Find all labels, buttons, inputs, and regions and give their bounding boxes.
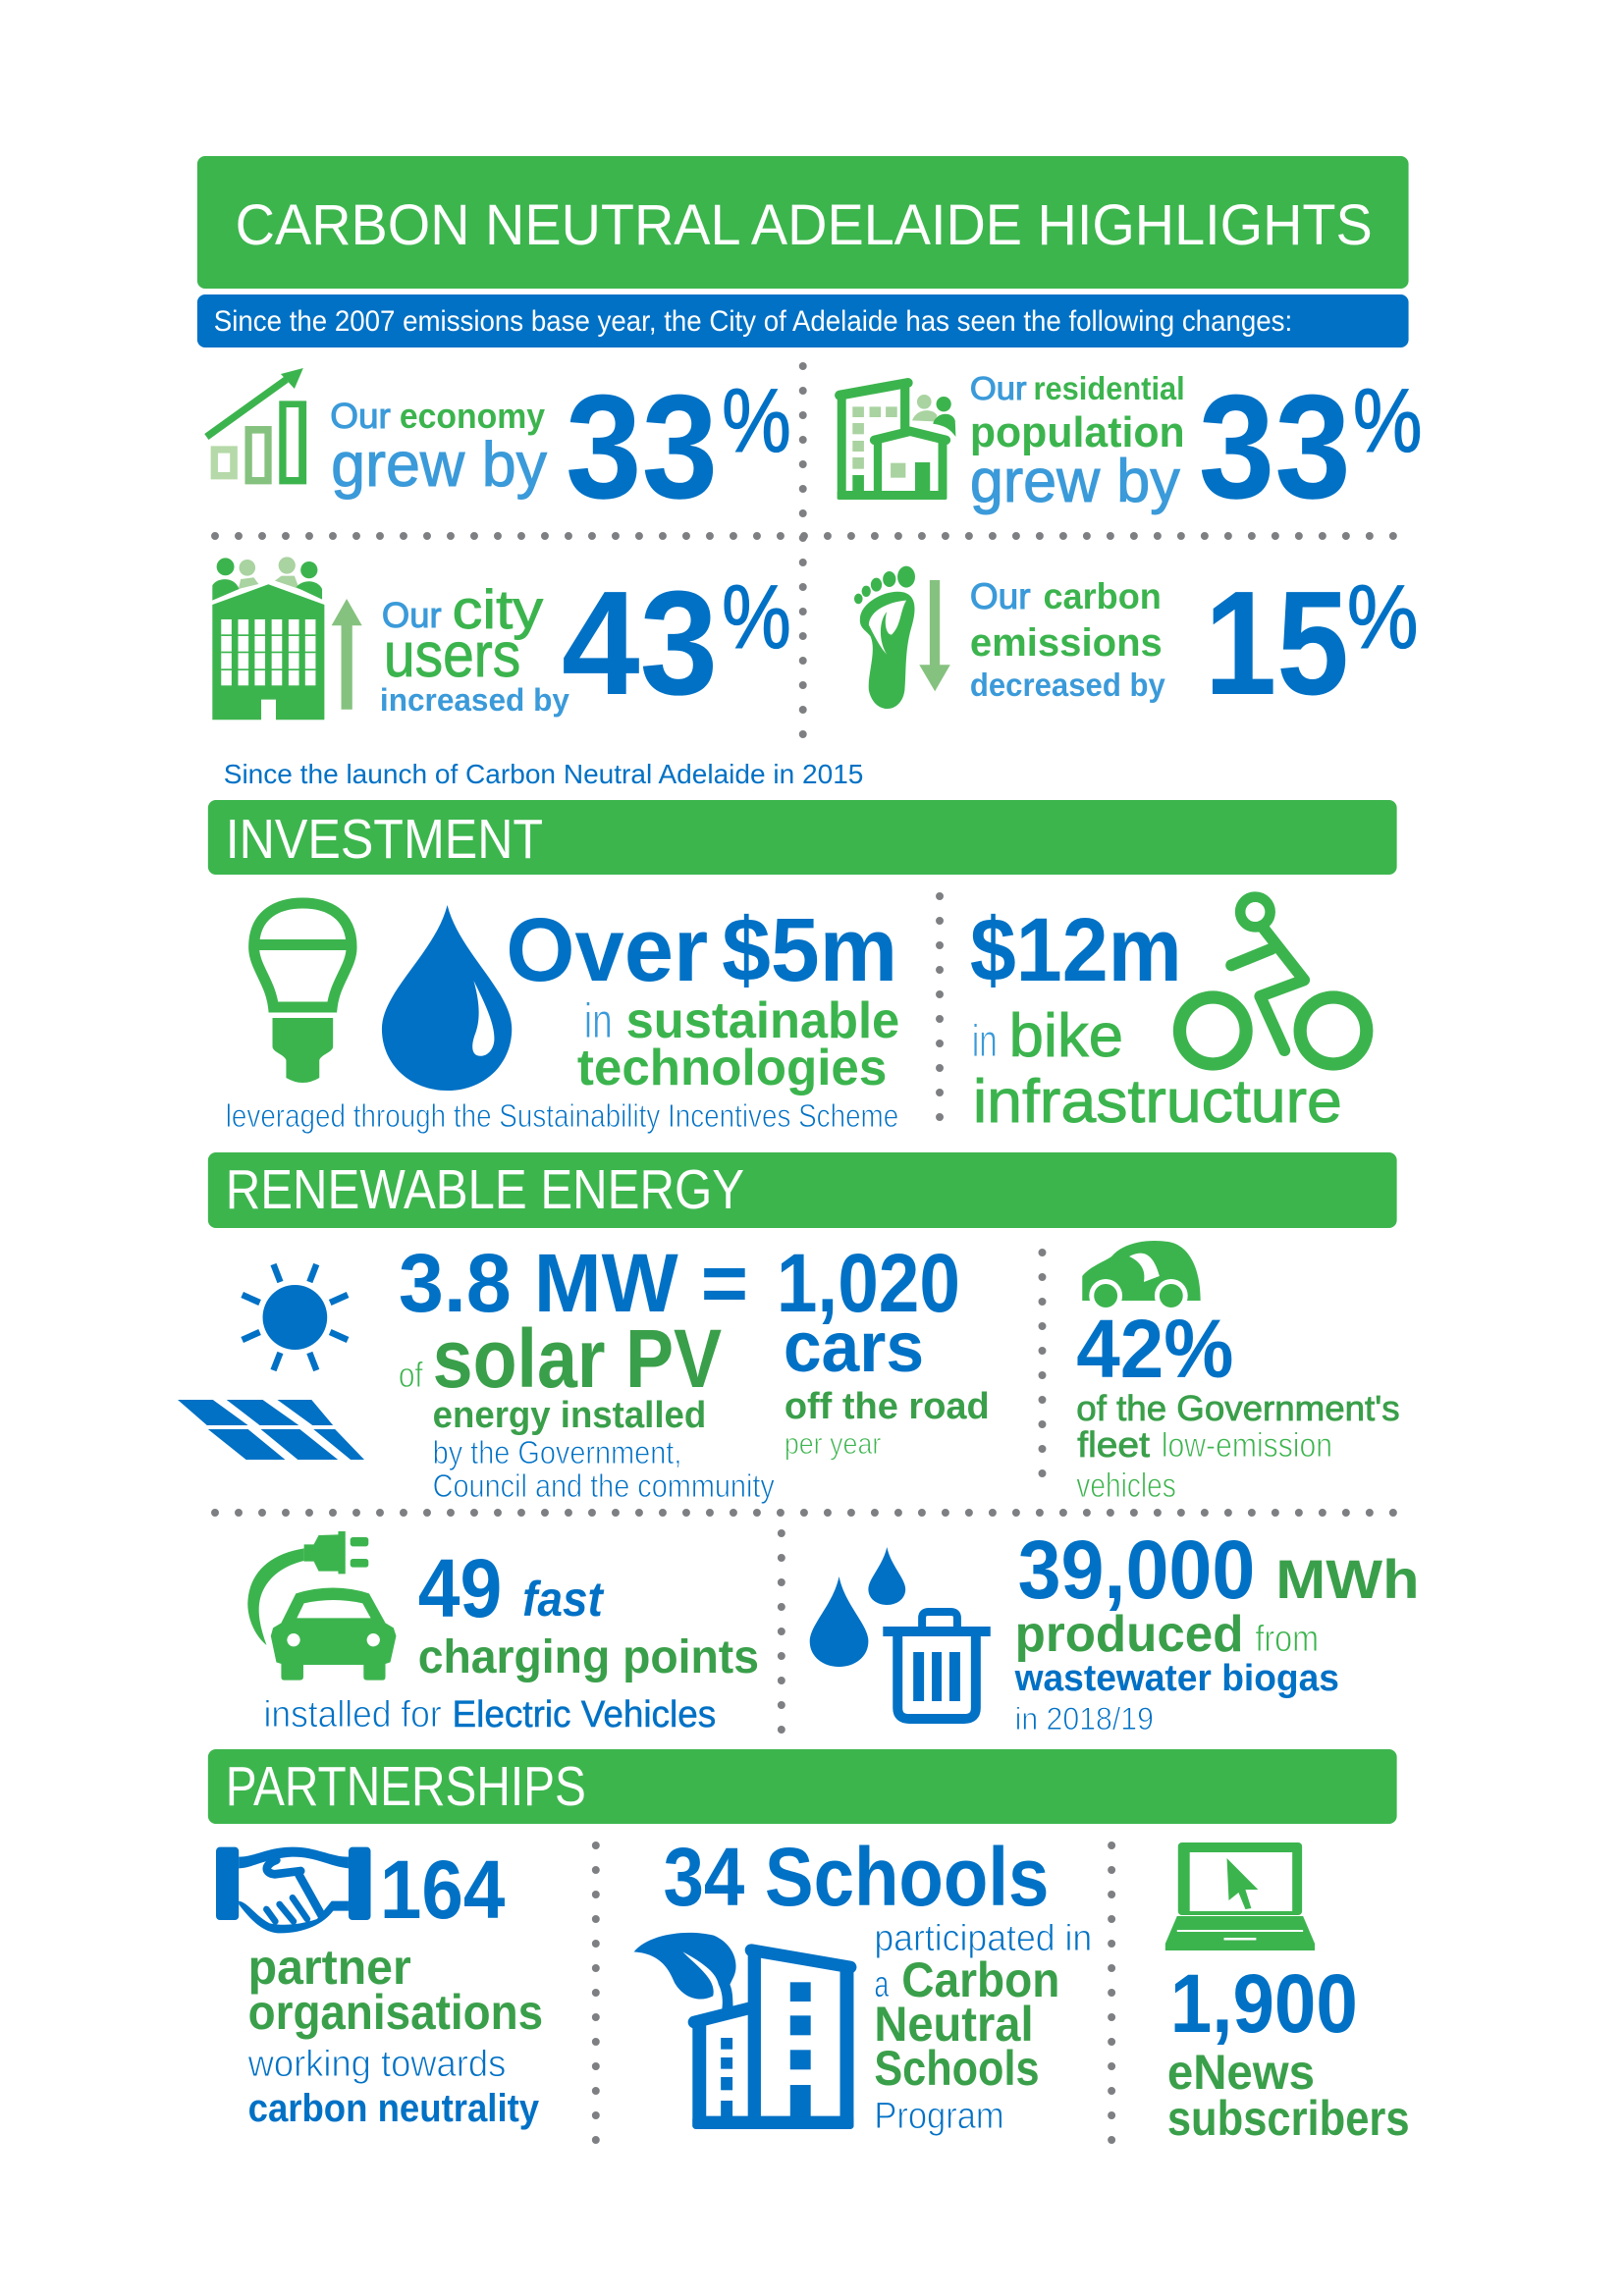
panel: eNews [1165, 1842, 1410, 2146]
schools label: Neutral [874, 1997, 1034, 2052]
solar PV label: of [399, 1356, 424, 1395]
stat: 15 percent: 15 [1205, 561, 1349, 725]
stat: 1,900: 1,900 [1170, 1957, 1358, 2050]
solar PV label: energy installed [433, 1395, 706, 1436]
stat: 33 percent: % [722, 371, 791, 471]
icon: bar chart with arrow [206, 368, 306, 484]
heading: partnerships: PARTNERSHIPS [226, 1756, 586, 1818]
solar PV label: solar PV [433, 1312, 722, 1405]
city users label: increased by [380, 682, 569, 718]
stat: 33 percent: % [1353, 371, 1422, 471]
partner label: working towards [247, 2044, 506, 2085]
biogas label [1014, 1605, 1339, 1736]
stat: 49 fast [418, 1542, 605, 1634]
stat: over 5 million [506, 900, 897, 1000]
stat: 49 fast: 49 [418, 1542, 502, 1634]
stat: 34 schools: 34 Schools [663, 1831, 1049, 1923]
city users label: users [384, 619, 520, 690]
title banner: CARBON NEUTRAL ADELAIDE HIGHLIGHTS [236, 194, 1373, 257]
subtitle banner [197, 294, 1409, 347]
stat: 43 percent: 43 [562, 561, 718, 725]
icon: electric car [1082, 1241, 1201, 1312]
heading: investment [208, 800, 1397, 875]
text: installed by [433, 1434, 775, 1504]
schools label: Carbon [901, 1952, 1059, 2007]
fleet label: vehicles [1076, 1467, 1176, 1505]
city users label: Our [382, 596, 442, 635]
panel: cars off the road [777, 1237, 990, 1461]
icon: up arrow [332, 599, 362, 710]
icon: laptop [1165, 1842, 1315, 1950]
heading: investment: INVESTMENT [226, 809, 543, 871]
panel: sustainable technologies [226, 900, 899, 1134]
stat: 33 percent: 33 [1199, 364, 1351, 529]
eNews label [1167, 2045, 1410, 2146]
text: installed by: by the Government, [433, 1434, 681, 1470]
residential population label: Our [970, 370, 1027, 406]
residential population label: residential [1034, 370, 1185, 406]
carbon emissions label: decreased by [970, 667, 1165, 703]
economy label: Our [330, 397, 391, 436]
icon: light bulb [254, 903, 352, 1083]
fleet label: low-emission [1162, 1426, 1332, 1465]
panel: wastewater biogas [810, 1523, 1420, 1736]
text: per year: per year [785, 1426, 881, 1461]
panel: carbon emissions [854, 561, 1419, 725]
stat: 49 fast: fast [522, 1572, 605, 1627]
economy label: grew by [331, 429, 547, 500]
text: since launch: Since the launch of Carbon Neutral Adelaide in 2015 [224, 759, 863, 789]
city users label: city [453, 578, 543, 640]
stat: 12 million: $12m [970, 900, 1182, 1000]
stat: 39,000 MWh: 39,000 [1018, 1523, 1255, 1616]
economy label: economy [400, 397, 545, 436]
sustainable technologies label [577, 991, 899, 1095]
stat: 15 percent: % [1347, 567, 1419, 667]
icon: buildings and residents [838, 383, 955, 500]
panel: partner organisations [216, 1843, 543, 2130]
panel: city users [212, 557, 791, 725]
icon: city building and people [212, 557, 324, 720]
heading: renewable energy [208, 1152, 1397, 1228]
carbon emissions label: Our [970, 576, 1031, 616]
bike infrastructure label: bike [1009, 1002, 1123, 1070]
text: off the road: off the road [785, 1386, 990, 1427]
biogas label: from [1255, 1619, 1319, 1660]
stat: over 5 million: Over [506, 900, 708, 1000]
panel: bike infrastructure [970, 897, 1367, 1136]
panel: solar PV [178, 1237, 775, 1504]
bike infrastructure label: in [972, 1015, 998, 1066]
carbon emissions label: emissions [970, 621, 1163, 665]
biogas label: in 2018/19 [1015, 1701, 1154, 1736]
schools label: participated in [874, 1918, 1092, 1959]
icon: water drop [382, 905, 512, 1091]
stat: 42 percent: 42% [1076, 1303, 1233, 1395]
sustainable technologies label: sustainable [626, 991, 899, 1048]
eNews label: subscribers [1167, 2091, 1410, 2146]
icon: solar panel [178, 1400, 364, 1460]
stat: 39,000 MWh: MWh [1275, 1548, 1420, 1610]
schools label [874, 1918, 1092, 2137]
bike infrastructure label [972, 1002, 1342, 1136]
sustainable technologies label: in [584, 993, 613, 1048]
fleet label: fleet [1077, 1425, 1150, 1465]
economy label [330, 397, 547, 500]
icon: cyclist [1179, 897, 1367, 1064]
schools label: a [874, 1964, 890, 2005]
text: incentives scheme: leveraged through the Sustainability Incentives Scheme [226, 1097, 898, 1134]
residential population label [970, 370, 1185, 515]
partner label: organisations [248, 1985, 543, 2040]
carbon emissions label: carbon [1043, 576, 1162, 616]
fleet label: of the Government's [1076, 1389, 1400, 1428]
eNews label: eNews [1167, 2045, 1315, 2100]
biogas label: wastewater biogas [1014, 1658, 1339, 1699]
heading: partnerships [208, 1749, 1397, 1824]
icon: handshake [216, 1847, 371, 1933]
residential population label: population [970, 408, 1185, 456]
solar PV label [399, 1312, 722, 1436]
stat: 33 percent: 33 [566, 364, 718, 529]
panel: residential population [838, 364, 1422, 529]
icon: sun [243, 1264, 348, 1370]
text: installed for EVs: Electric Vehicles [453, 1694, 716, 1735]
icon: car and plug [247, 1531, 396, 1681]
stat: 1,020: 1,020 [777, 1237, 960, 1329]
bike infrastructure label: infrastructure [973, 1068, 1342, 1136]
stat: 39,000 MWh [1018, 1523, 1420, 1616]
biogas label: produced [1015, 1605, 1243, 1662]
panel: schools [634, 1831, 1092, 2137]
heading: renewable energy: RENEWABLE ENERGY [226, 1159, 744, 1221]
residential population label: grew by [970, 448, 1180, 515]
panel: economy [206, 364, 791, 529]
panel: charging points [247, 1531, 759, 1735]
title banner [197, 156, 1409, 289]
partner label: carbon neutrality [248, 2087, 539, 2130]
fleet label [1076, 1389, 1400, 1505]
stat: 43 percent: % [722, 567, 791, 667]
stat: 164: 164 [380, 1843, 506, 1936]
partner label: partner [248, 1940, 411, 1995]
text: cars: cars [784, 1308, 924, 1387]
carbon emissions label [970, 576, 1165, 703]
text: installed for EVs: installed for [264, 1694, 442, 1735]
schools label: Schools [874, 2041, 1039, 2096]
schools label: Program [874, 2096, 1004, 2137]
sustainable technologies label: technologies [577, 1039, 887, 1095]
text: installed by: Council and the community [433, 1468, 775, 1504]
icon: water drops [810, 1547, 905, 1667]
stat: 3.8 MW: 3.8 MW = [399, 1237, 748, 1329]
icon: school building with leaf [634, 1933, 853, 2129]
text: charging points: charging points [418, 1631, 759, 1683]
icon: footprint with leaf [854, 566, 950, 709]
partner label [247, 1940, 543, 2130]
text: installed for EVs [264, 1694, 716, 1735]
subtitle banner: Since the 2007 emissions base year, the City of Adelaide has seen the following changes: [214, 305, 1292, 338]
icon: rubbish bin [883, 1612, 991, 1719]
city users label [380, 578, 569, 718]
panel: government fleet [1076, 1241, 1400, 1505]
stat: over 5 million: $5m [722, 900, 897, 1000]
